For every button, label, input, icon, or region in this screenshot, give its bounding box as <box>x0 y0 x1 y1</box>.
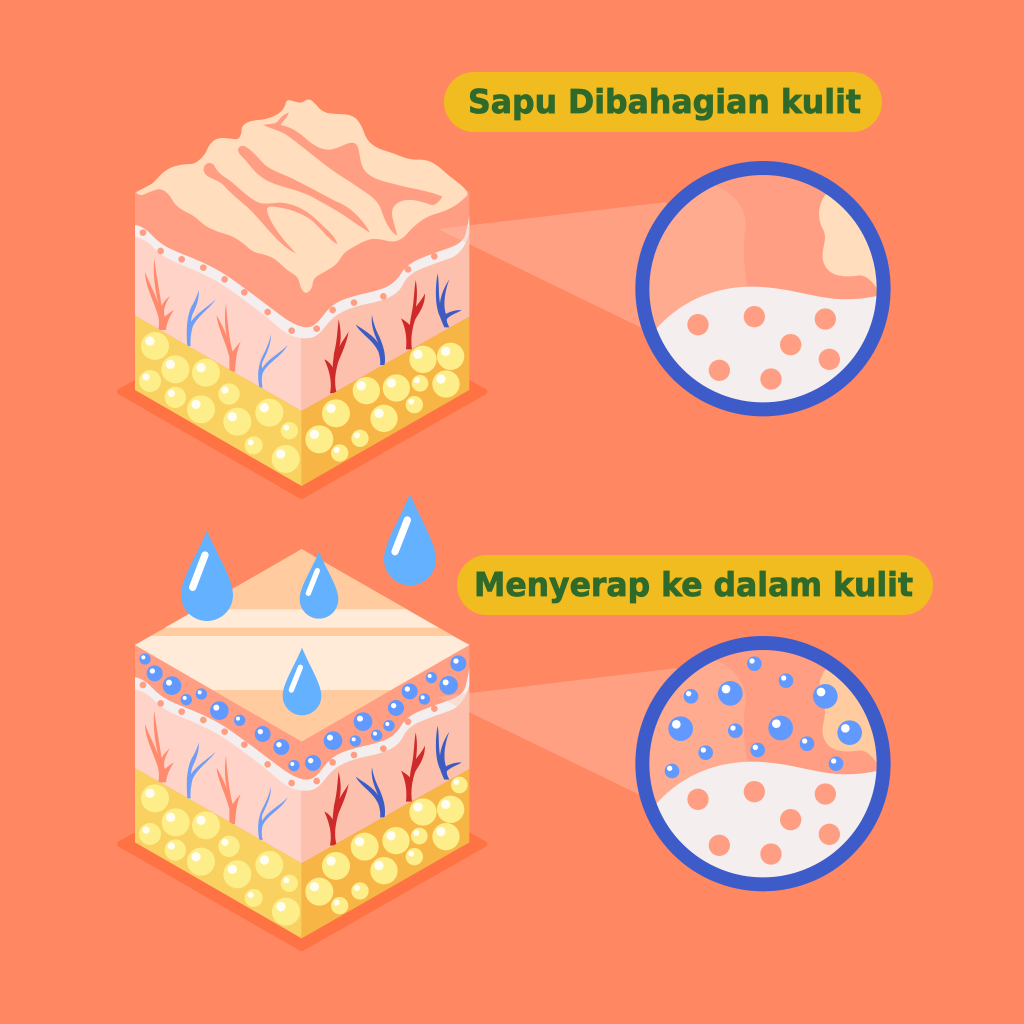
fat layer <box>135 316 469 486</box>
block shadow <box>120 290 484 496</box>
dermis layer <box>135 676 469 863</box>
block shadow <box>120 742 484 948</box>
icon: water drop right <box>384 494 436 585</box>
epidermis layer <box>135 576 469 780</box>
magnified view: dry skin <box>635 161 891 416</box>
icon: water drop on surface <box>283 648 321 715</box>
magnified skin tissue <box>649 650 877 878</box>
skin block: dry skin <box>120 99 484 496</box>
blood vessels <box>145 258 462 393</box>
absorbed water bubbles <box>139 653 466 771</box>
white basal band with cells <box>135 215 469 338</box>
magnifier ring <box>642 643 884 884</box>
magnified view: moisturised skin <box>635 636 891 892</box>
blood vessels <box>145 711 462 846</box>
flaky dry skin surface <box>136 99 467 293</box>
skin block: moisturised skin <box>120 494 484 948</box>
label pill: Sapu Dibahagian kulit: Sapu Dibahagian kulit <box>468 82 861 121</box>
icon: water drop left <box>181 531 233 621</box>
icon: water drop centre <box>300 552 338 619</box>
label pill: Menyerap ke dalam kulit <box>457 555 933 615</box>
fat layer <box>135 768 469 938</box>
serum coated top surface <box>135 549 469 742</box>
magnifier beam bottom <box>438 668 677 795</box>
label pill: Sapu Dibahagian kulit <box>444 72 882 132</box>
dermis layer <box>135 223 469 411</box>
label pill: Menyerap ke dalam kulit: Menyerap ke dalam kulit <box>474 565 913 604</box>
magnified skin tissue <box>650 175 877 402</box>
white basal band with cells <box>135 667 469 791</box>
magnifier beam top <box>438 202 667 328</box>
magnifier ring <box>642 168 884 409</box>
epidermis layer <box>135 123 469 327</box>
